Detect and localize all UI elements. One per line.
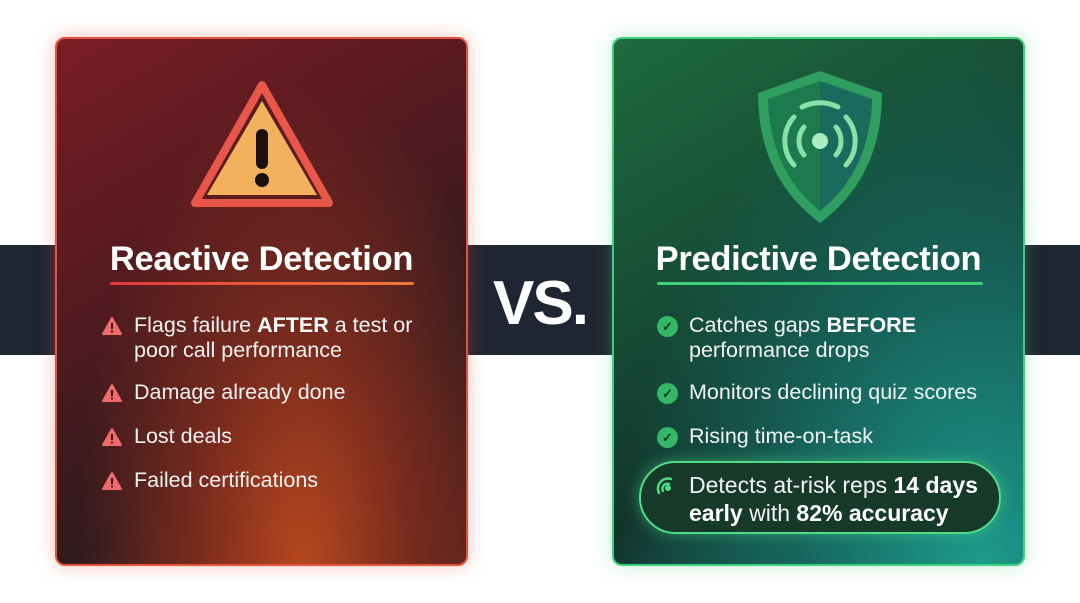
bullet list (657, 313, 977, 448)
panel: predictive detection: Rising time-on-task (689, 424, 873, 448)
panel: reactive detection: Damage already done (134, 380, 346, 404)
panel: reactive detection: Lost deals (134, 424, 232, 448)
panel: reactive detection: Failed certifications (134, 468, 318, 492)
heading: Predictive Detection: Predictive Detection (656, 240, 981, 278)
panel: reactive detection: Flags failure AFTER a test or (134, 313, 412, 337)
panel: predictive detection: ✓ (662, 430, 673, 445)
panel: predictive detection: ✓ (662, 319, 673, 334)
panel: reactive detection (55, 37, 468, 566)
heading: Reactive Detection: Reactive Detection (110, 240, 413, 278)
icon: warning triangle (191, 81, 333, 207)
icon: radar shield (758, 71, 882, 223)
vs label: VS. (493, 269, 587, 338)
panel: predictive detection: Monitors declining quiz scores (689, 380, 977, 404)
panel: predictive detection (612, 37, 1025, 566)
callout: 14 days early: early with 82% accuracy (689, 500, 949, 526)
callout: 14 days early (639, 461, 1001, 534)
bullet list (102, 313, 412, 492)
panel: predictive detection: Catches gaps BEFORE (689, 313, 916, 337)
panel: reactive detection: poor call performance (134, 338, 342, 362)
callout: 14 days early: Detects at-risk reps 14 days (689, 472, 978, 498)
panel: predictive detection: performance drops (689, 338, 869, 362)
panel: predictive detection: ✓ (662, 386, 673, 401)
